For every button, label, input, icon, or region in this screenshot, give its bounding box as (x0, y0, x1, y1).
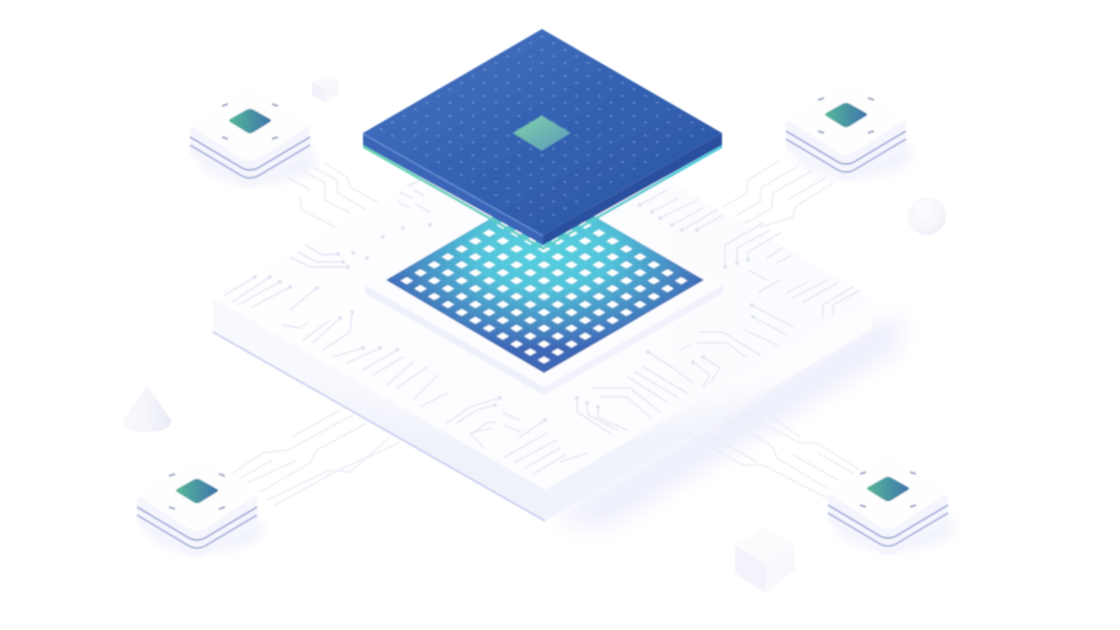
chip centre die (513, 116, 571, 151)
socket base (386, 187, 704, 373)
chip top face (363, 29, 722, 235)
platform right side (544, 285, 723, 395)
main board (213, 107, 872, 521)
platform top face (365, 182, 723, 387)
contact pads (393, 193, 695, 368)
board top face (213, 107, 872, 490)
sphere (908, 197, 946, 235)
top chip (363, 29, 722, 250)
board bottom edge (213, 332, 545, 521)
chip right side (543, 133, 722, 245)
traces: back-left corner (225, 245, 352, 350)
large cube (735, 527, 795, 593)
platform left side (365, 285, 544, 395)
traces: front-right edge (560, 352, 693, 462)
traces: right corner (759, 280, 860, 318)
outer traces: links to the four modules (233, 160, 860, 505)
board right side (545, 298, 872, 521)
module: top left (190, 90, 310, 187)
module: bottom right (828, 458, 948, 555)
traces: back-right edge (640, 190, 790, 280)
chip left side (363, 133, 543, 245)
module: bottom left (137, 460, 257, 557)
trace end pads (253, 203, 755, 422)
traces: front-left edge (333, 348, 447, 407)
cone (123, 385, 171, 432)
small cube (312, 75, 339, 102)
chip dot matrix (369, 33, 716, 231)
board drop shadow (552, 318, 902, 526)
traces: back-left edge (398, 180, 430, 212)
board left side (213, 298, 545, 521)
module: top right (786, 84, 906, 181)
socket contact grid (386, 187, 704, 373)
module shadows (147, 132, 954, 550)
socket platform (365, 182, 723, 395)
board traces (225, 180, 860, 473)
chip underside glow (363, 145, 722, 250)
chip edge highlight (363, 134, 543, 236)
